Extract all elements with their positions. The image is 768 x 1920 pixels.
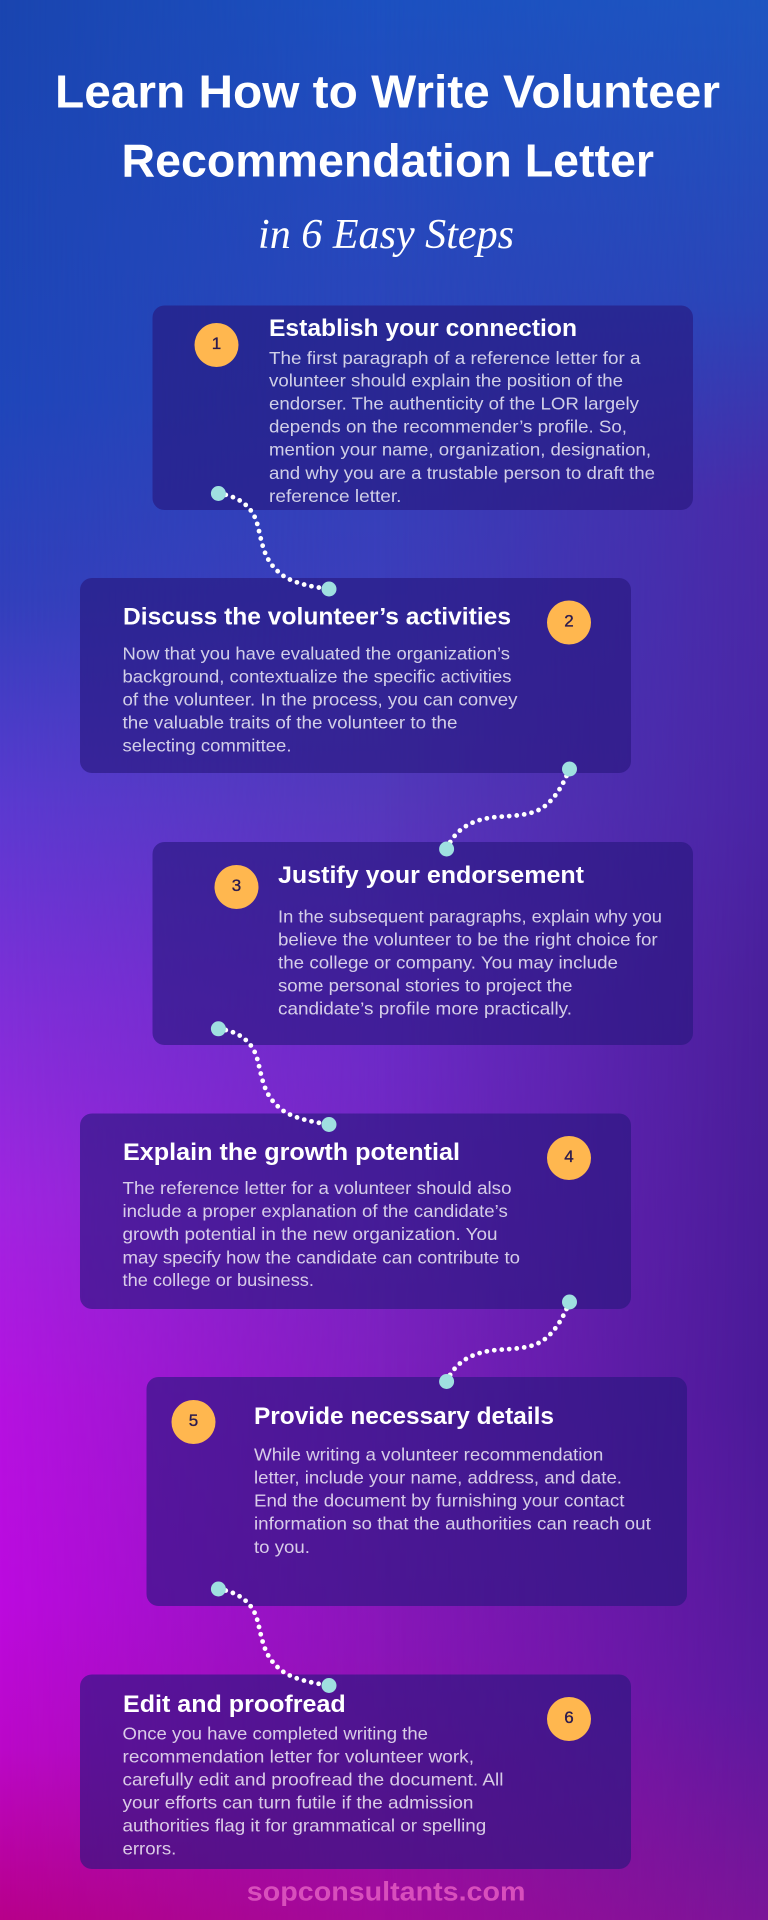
- text block: step 6: Once you have completed writing the: [122, 1724, 428, 1744]
- text block: step 1: The first paragraph of a reference letter for a: [269, 348, 641, 368]
- badge: number 2: 2: [564, 612, 574, 630]
- title: [55, 66, 720, 187]
- badge: number 1: [194, 323, 238, 367]
- text block: step 1: endorser. The authenticity of the LOR largely: [269, 394, 639, 414]
- text block: step 1: volunteer should explain the position of the: [269, 371, 623, 391]
- badge: number 1: 1: [212, 334, 221, 353]
- badge: number 6: [547, 1697, 591, 1741]
- text block: step 3: [278, 906, 662, 1018]
- subtitle: in 6 Easy Steps: [258, 212, 514, 258]
- text block: step 4: [122, 1178, 520, 1290]
- text block: step 2: background, contextualize the specific activities: [122, 666, 512, 686]
- heading: step 1: Establish your connection: [269, 315, 577, 342]
- text block: step 1: [269, 348, 655, 506]
- badge: number 6: 6: [564, 1708, 574, 1727]
- text block: step 5: to you.: [254, 1537, 310, 1557]
- heading: step 2: Discuss the volunteer’s activities: [123, 604, 511, 631]
- arrow: connector step 5 to 6: [211, 1582, 336, 1693]
- text block: step 4: may specify how the candidate can contribute to: [122, 1247, 520, 1267]
- text block: step 6: recommendation letter for volunteer work,: [122, 1747, 474, 1767]
- panel: step 3: [152, 842, 693, 1045]
- badge: number 2: [547, 600, 591, 644]
- heading: step 6: Edit and proofread: [123, 1691, 346, 1718]
- panel: step 5: [146, 1377, 687, 1606]
- text block: step 5: letter, include your name, address, and date.: [254, 1468, 622, 1488]
- text block: step 4: The reference letter for a volunteer should also: [122, 1178, 512, 1198]
- text block: step 5: information so that the authorities can reach out: [254, 1514, 651, 1534]
- text block: step 6: authorities flag it for grammatical or spelling: [122, 1816, 486, 1836]
- text block: step 3: candidate’s profile more practically.: [278, 998, 572, 1018]
- arrow: connector step 1 to 2: [211, 486, 336, 596]
- text block: step 1: and why you are a trustable person to draft the: [269, 463, 655, 483]
- arrow: connector step 3 to 4: [211, 1021, 336, 1132]
- text block: step 6: [122, 1724, 504, 1858]
- text block: step 2: [122, 644, 518, 756]
- badge: number 4: [547, 1136, 591, 1180]
- text block: step 4: include a proper explanation of the candidate’s: [122, 1201, 508, 1221]
- text block: step 1: reference letter.: [269, 486, 402, 506]
- heading: step 3: Justify your endorsement: [278, 862, 584, 889]
- panel: step 4: [80, 1114, 631, 1309]
- title: Learn How to Write Volunteer: [55, 66, 720, 118]
- text block: step 4: the college or business.: [122, 1270, 314, 1290]
- panel: step 2: [80, 578, 631, 773]
- text block: step 3: believe the volunteer to be the right choice for: [278, 930, 658, 950]
- arrow: connector step 2 to 3: [439, 762, 577, 856]
- text block: step 6: your efforts can turn futile if the admission: [122, 1792, 474, 1812]
- badge: number 5: 5: [189, 1411, 198, 1430]
- heading: step 4: Explain the growth potential: [123, 1139, 460, 1166]
- arrow: connector step 4 to 5: [439, 1294, 577, 1389]
- heading: step 5: Provide necessary details: [254, 1403, 554, 1430]
- text block: step 3: the college or company. You may include: [278, 952, 618, 972]
- text block: step 2: Now that you have evaluated the organization’s: [122, 644, 510, 664]
- text block: step 3: some personal stories to project the: [278, 976, 572, 996]
- text block: step 5: End the document by furnishing your contact: [254, 1491, 625, 1511]
- badge: number 5: [172, 1400, 216, 1444]
- badge: number 4: 4: [564, 1147, 574, 1166]
- text block: step 3: In the subsequent paragraphs, explain why you: [278, 906, 662, 926]
- panel: step 6: [80, 1674, 631, 1869]
- text block: step 5: While writing a volunteer recommendation: [254, 1445, 603, 1465]
- text block: step 2: of the volunteer. In the process, you can convey: [122, 690, 518, 710]
- text block: step 5: [254, 1445, 651, 1557]
- text block: step 6: errors.: [122, 1838, 176, 1858]
- text block: step 1: mention your name, organization, designation,: [269, 440, 651, 460]
- title: Recommendation Letter: [122, 135, 654, 187]
- text block: step 1: depends on the recommender’s profile. So,: [269, 417, 627, 437]
- text block: step 6: carefully edit and proofread the document. All: [122, 1770, 504, 1790]
- badge: number 3: 3: [232, 876, 241, 895]
- text block: step 2: the valuable traits of the volunteer to the: [122, 712, 458, 732]
- footer website: sopconsultants.com: [247, 1876, 526, 1906]
- panel: step 1: [152, 306, 693, 510]
- text block: step 4: growth potential in the new organization. You: [122, 1224, 498, 1244]
- text block: step 2: selecting committee.: [122, 736, 292, 756]
- badge: number 3: [214, 865, 258, 909]
